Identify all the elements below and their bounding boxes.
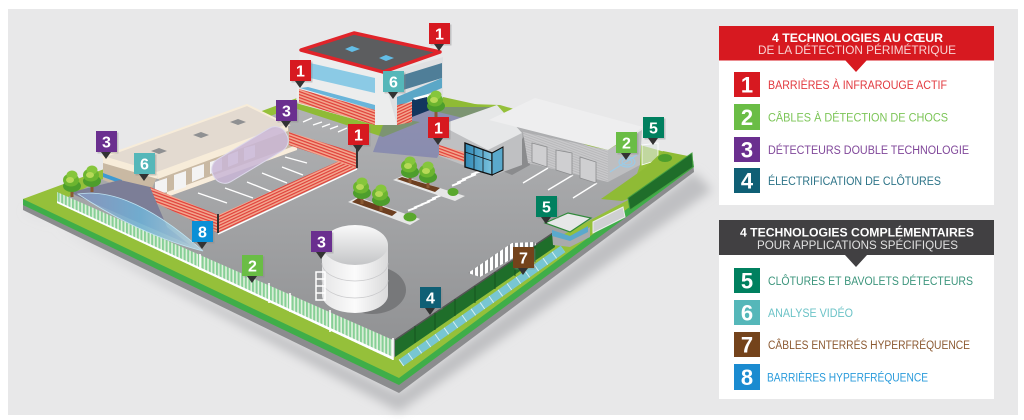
- marker 5 guard house: [536, 196, 558, 224]
- planter one: [393, 156, 465, 201]
- marker 7: [513, 247, 536, 275]
- legend item 8: [734, 364, 928, 390]
- panel heading: core technologies: [719, 26, 994, 72]
- green electrified fence: [395, 233, 555, 357]
- guard house: [545, 213, 591, 247]
- marker 1 top roof: [429, 23, 452, 51]
- legend item 4: 4: [741, 168, 754, 194]
- legend item 6: ANALYSE VIDÉO: [768, 307, 853, 320]
- panel: complementary technologies: [719, 220, 994, 399]
- legend item 8: BARRIÈRES HYPERFRÉQUENCE: [767, 372, 928, 384]
- marker 4: 4: [426, 290, 435, 308]
- white overhang zone: [468, 242, 536, 277]
- marker 3 parking: 3: [282, 104, 291, 120]
- camera detection cone: office: [373, 98, 493, 158]
- platform base and grass: [23, 98, 694, 393]
- marker 1 lobby: 1: [434, 120, 443, 138]
- marker 5 guard house: 5: [542, 200, 551, 216]
- marker 3 tank: [311, 231, 334, 259]
- marker 2 fence: 2: [248, 258, 257, 276]
- trees: [63, 90, 445, 197]
- grass around office: [294, 98, 420, 137]
- isometric site illustration: [23, 33, 712, 412]
- panel: core technologies: [719, 26, 994, 205]
- marker 2 warehouse: [616, 132, 638, 160]
- marker 6 warehouse: 6: [140, 156, 149, 174]
- legend item 2: 2: [741, 105, 753, 130]
- parking markings: [198, 118, 597, 234]
- panel heading: complementary technologies: 4 TECHNOLOGIES COMPLÉMENTAIRES: [740, 226, 974, 240]
- legend item 4: [734, 168, 941, 194]
- legend item 5: [734, 268, 973, 294]
- marker 8: [192, 221, 214, 249]
- platform drop shadow: [23, 172, 712, 412]
- legend item 2: CÂBLES À DÉTECTION DE CHOCS: [768, 112, 948, 124]
- marker 3 warehouse: [96, 131, 118, 159]
- legend item 7: [734, 332, 970, 358]
- legend item 1: 1: [741, 72, 753, 98]
- hyperfrequency barrier lens: [78, 193, 203, 251]
- marker 3 warehouse: 3: [102, 134, 111, 152]
- legend item 6: 6: [741, 300, 753, 326]
- marker 1 lobby: [428, 117, 450, 145]
- marker 5 cabin: [643, 117, 666, 145]
- marker 2 warehouse: 2: [622, 136, 631, 152]
- legend item 5: CLÔTURES ET BAVOLETS DÉTECTEURS: [768, 275, 973, 288]
- marker 5 cabin: 5: [649, 120, 658, 138]
- marker 8: 8: [198, 224, 207, 242]
- glass cabin: [642, 143, 658, 165]
- buried cable: [401, 249, 563, 363]
- gate: [593, 207, 625, 233]
- legend item 8: 8: [741, 365, 753, 390]
- marker 1 parking: 1: [354, 128, 363, 144]
- right grass patch and bushes: [601, 151, 693, 201]
- warehouse ground shadow: [500, 135, 530, 175]
- marker 1 office: [290, 60, 312, 88]
- double technology detection beam: [207, 122, 293, 188]
- right warehouse: [489, 98, 643, 183]
- office building: [296, 33, 443, 125]
- legend item 6: [734, 300, 853, 326]
- camera detection cone: warehouse: [72, 180, 190, 245]
- asphalt ground: [57, 106, 640, 358]
- legend item 4: ÉLECTRIFICATION DE CLÔTURES: [768, 175, 941, 188]
- legend item 3: 3: [741, 138, 753, 162]
- storage tank: [316, 225, 388, 313]
- legend item 3: [734, 137, 969, 162]
- marker 7: 7: [519, 250, 528, 268]
- right green fence: [628, 153, 693, 210]
- legend item 2: [734, 104, 948, 130]
- marker 2 fence: [242, 255, 264, 283]
- legend item 3: DÉTECTEURS DOUBLE TECHNOLOGIE: [768, 144, 969, 157]
- office roof: [301, 33, 440, 72]
- legend item 7: CÂBLES ENTERRÉS HYPERFRÉQUENCE: [768, 339, 970, 352]
- marker 1 office: 1: [296, 64, 305, 80]
- marker 3 tank: 3: [317, 234, 326, 252]
- planter two: [348, 178, 420, 225]
- tank shadow: [338, 266, 406, 314]
- marker 3 parking: [276, 100, 298, 128]
- panel heading: complementary technologies: POUR APPLICATIONS SPÉCIFIQUES: [757, 239, 958, 252]
- marker 1 parking: [348, 124, 370, 152]
- legend item 1: [734, 72, 947, 98]
- lobby building: [439, 105, 522, 176]
- infrared barriers around parking: [150, 132, 357, 233]
- panel heading: complementary technologies: [719, 220, 994, 267]
- marker 4: [420, 287, 442, 315]
- marker 6 warehouse: [134, 153, 156, 181]
- marker 1 top roof: 1: [435, 26, 444, 44]
- legend item 7: 7: [741, 332, 753, 358]
- panel heading: core technologies: 4 TECHNOLOGIES AU CŒUR: [772, 33, 944, 45]
- marker 6 office: [383, 71, 406, 99]
- white fence: [57, 192, 393, 360]
- left warehouse: [103, 105, 297, 197]
- legend item 1: BARRIÈRES À INFRAROUGE ACTIF: [768, 79, 947, 92]
- panel heading: core technologies: DE LA DÉTECTION PÉRIMÉTRIQUE: [758, 44, 956, 57]
- legend item 5: 5: [741, 268, 753, 294]
- marker 6 office: 6: [389, 74, 398, 92]
- detection signal icon: [610, 155, 637, 172]
